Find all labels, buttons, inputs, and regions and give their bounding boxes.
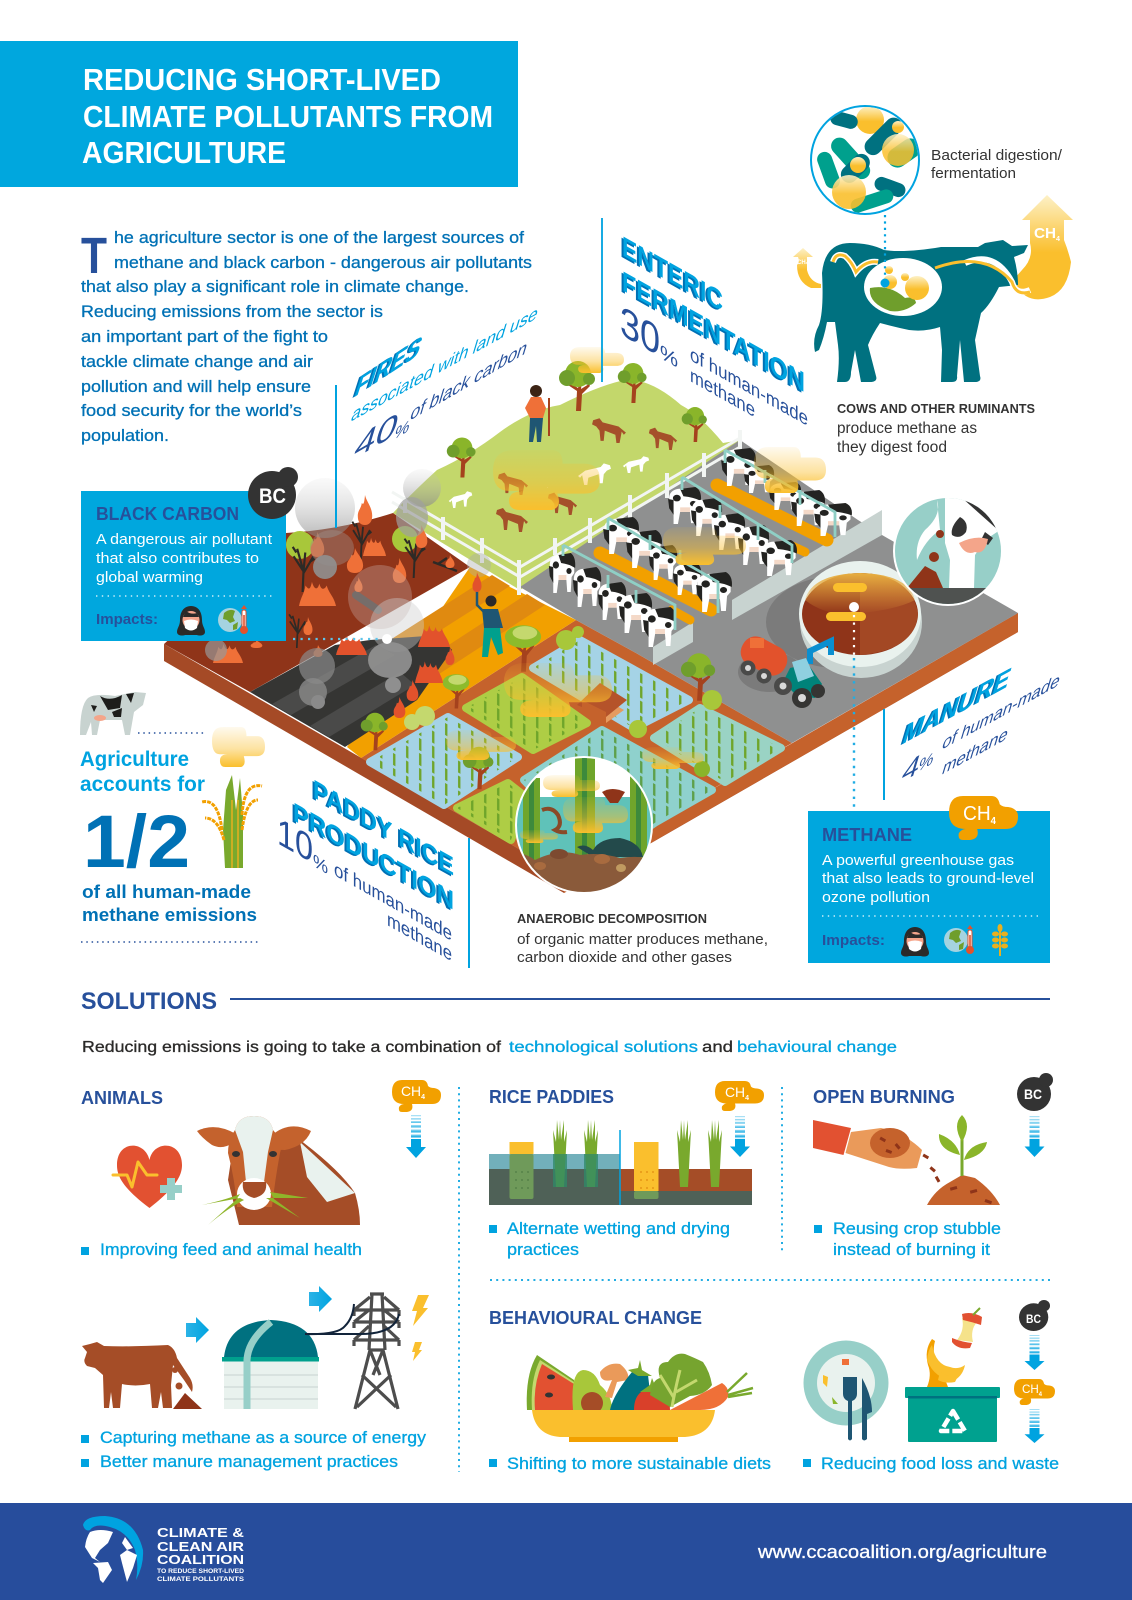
intro paragraph: tackle climate change and air	[81, 353, 314, 371]
pasture animals	[449, 418, 677, 532]
CH4 reduction badge: 4	[745, 1095, 749, 1102]
pasture hill	[393, 380, 741, 590]
BC reduction badge	[1017, 1073, 1053, 1157]
burnt trees	[286, 522, 457, 648]
label: bacterial digestion: Bacterial digestion/	[931, 147, 1063, 164]
fires stat: %	[392, 416, 413, 445]
diet bullet: Shifting to more sustainable diets	[507, 1454, 771, 1473]
icon: warming earth	[218, 605, 248, 634]
platform sides	[164, 613, 1018, 893]
black carbon description: global warming	[96, 569, 203, 586]
smoke plumes	[205, 469, 491, 709]
website: www.ccacoalition.org/agriculture	[757, 1541, 1047, 1562]
cow caption: COWS AND OTHER RUMINANTS	[837, 401, 1035, 416]
manure heading: MANURE	[899, 660, 1015, 751]
manure stat	[898, 669, 1063, 789]
intro paragraph: that also play a significant role in climate change.	[81, 278, 469, 296]
coalition name: CLEAN AIR	[157, 1540, 244, 1554]
methane panel: METHANE	[822, 825, 912, 845]
enteric heading: FERMENTATION	[622, 266, 805, 399]
manure label	[884, 660, 1063, 800]
feed bullet: Improving feed and animal health	[100, 1240, 362, 1259]
BC reduction badge: BC	[1024, 1087, 1042, 1102]
rice paddies	[370, 640, 781, 860]
panel: animals	[81, 1080, 441, 1471]
half of methane callout: accounts for	[80, 773, 205, 796]
paddy stat: methane	[387, 908, 452, 966]
icon: heart health	[113, 1146, 182, 1208]
coalition name: COALITION	[157, 1553, 244, 1567]
fires label	[336, 301, 541, 528]
connector methane	[849, 602, 859, 811]
panel: behavioural change: BEHAVIOURAL CHANGE	[489, 1308, 702, 1328]
intro paragraph: pollution and will help ensure	[81, 378, 311, 396]
black carbon panel	[81, 467, 298, 641]
burnt land	[164, 513, 470, 692]
black carbon panel: Impacts:	[96, 612, 158, 628]
panel: rice paddies: RICE PADDIES	[489, 1087, 614, 1107]
cow caption: they digest food	[837, 439, 947, 456]
cow caption	[837, 401, 1035, 456]
feed strips	[600, 485, 827, 620]
CH4 badge	[949, 796, 1018, 840]
paddy stat: 10	[277, 809, 313, 872]
CH4 reduction badge: CH	[725, 1084, 745, 1100]
anaerobic decomposition circle	[515, 756, 653, 900]
paddy stat: %	[313, 850, 328, 879]
bacteria circle	[811, 106, 924, 214]
BC badge: BC	[259, 485, 286, 508]
cow with digestive system: 4	[1056, 236, 1060, 243]
icon: lightning	[412, 1295, 429, 1361]
paddy heading: PRODUCTION	[291, 798, 452, 917]
icon: rice plant	[202, 775, 262, 868]
half of methane callout: of all human-made	[82, 881, 251, 902]
energy bullets: Capturing methane as a source of energy	[100, 1428, 427, 1447]
panel: rice paddies	[489, 1081, 764, 1259]
burning bullet: instead of burning it	[833, 1240, 990, 1259]
BC and CH4 reduction badges: 4	[1039, 1392, 1043, 1398]
farmyard walls	[653, 510, 882, 665]
anaerobic caption	[517, 912, 768, 966]
enteric fermentation label	[602, 218, 808, 431]
title banner: REDUCING SHORT-LIVED	[83, 63, 441, 97]
coalition name: CLIMATE &	[157, 1526, 244, 1540]
manure heading: MANURE	[897, 661, 1013, 752]
rice bullet: Alternate wetting and drying	[507, 1219, 730, 1238]
enteric heading: ENTERIC	[622, 231, 723, 318]
coalition name	[157, 1526, 245, 1583]
icon: bowl of food	[527, 1354, 753, 1442]
drop cap T: T	[81, 227, 107, 284]
udder circle	[893, 498, 1001, 606]
methane panel	[808, 796, 1050, 963]
paddy heading: PRODUCTION	[293, 797, 454, 916]
title banner: CLIMATE POLLUTANTS FROM	[83, 100, 493, 134]
manure stat: methane	[940, 723, 1011, 780]
anaerobic caption: carbon dioxide and other gases	[517, 950, 732, 966]
label: bacterial digestion	[931, 147, 1063, 182]
orange crop strip	[346, 567, 576, 758]
cow with digestive system	[793, 195, 1073, 382]
icon: small cow	[80, 692, 146, 735]
energy bullets: Better manure management practices	[100, 1452, 398, 1471]
arrow	[309, 1286, 332, 1312]
cow with digestive system: CH4	[797, 260, 808, 266]
solutions intro: and	[702, 1039, 733, 1056]
icon: health	[901, 927, 929, 957]
BC and CH4 reduction badges: CH	[1022, 1382, 1039, 1396]
black carbon description	[96, 531, 273, 586]
solutions intro	[82, 1039, 897, 1056]
isometric farm map	[164, 347, 1018, 900]
icon: health	[177, 606, 205, 636]
enteric stat: methane	[690, 364, 755, 422]
fires	[213, 495, 454, 718]
methane description: that also leads to ground-level	[822, 870, 1034, 887]
icon: wheat	[992, 924, 1008, 956]
rice water diagram	[489, 1120, 752, 1205]
title banner: AGRICULTURE	[82, 136, 286, 170]
enteric stat	[620, 296, 808, 431]
manure stat: %	[916, 748, 937, 777]
intro paragraph	[81, 227, 532, 445]
arrow	[186, 1317, 209, 1343]
BC and CH4 reduction badges	[1014, 1300, 1055, 1443]
fires stat: 40	[350, 404, 404, 468]
icon: biogas digester	[222, 1320, 319, 1409]
fence	[392, 430, 740, 595]
fires stat	[350, 336, 530, 468]
icon: apple core	[952, 1308, 982, 1348]
icon: cow with manure	[82, 1342, 202, 1409]
footer	[0, 1503, 1132, 1600]
connector black carbon	[293, 634, 392, 644]
rice bullet: practices	[507, 1240, 579, 1259]
icon: plate and cutlery	[804, 1340, 888, 1440]
intro paragraph: he agriculture sector is one of the largest sources of	[114, 229, 524, 247]
solutions heading: SOLUTIONS	[81, 988, 217, 1015]
BC and CH4 reduction badges: BC	[1026, 1312, 1041, 1326]
paddy stat: of human-made	[334, 858, 452, 946]
panel: animals: ANIMALS	[81, 1088, 163, 1108]
burning bullet: Reusing crop stubble	[833, 1219, 1001, 1238]
methane description: ozone pollution	[822, 889, 930, 906]
fires heading: FIRES	[349, 329, 425, 406]
CH4 reduction badge	[392, 1080, 441, 1158]
title banner	[0, 41, 518, 187]
icon: warming earth	[944, 925, 974, 954]
half of methane callout	[80, 692, 265, 942]
fires subtitle: associated with land use	[349, 301, 541, 427]
methane description	[822, 852, 1034, 906]
logo	[83, 1516, 143, 1583]
enteric heading: ENTERIC	[620, 232, 721, 319]
paddy heading: PADDY RICE	[311, 775, 452, 883]
enteric stat: %	[660, 340, 678, 373]
intro paragraph: methane and black carbon - dangerous air pollutants	[114, 254, 532, 272]
energy bullets	[81, 1428, 427, 1471]
burnt black strip	[250, 635, 452, 747]
enteric heading: FERMENTATION	[620, 267, 803, 400]
cow with digestive system: CH	[1034, 225, 1056, 242]
waste bullet: Reducing food loss and waste	[821, 1454, 1059, 1473]
anaerobic caption: of organic matter produces methane,	[517, 932, 768, 948]
half of methane callout: Agriculture	[80, 748, 189, 771]
solutions intro: Reducing emissions is going to take a combination of	[82, 1039, 502, 1056]
panel: behavioural change	[489, 1300, 1059, 1473]
intro paragraph: an important part of the fight to	[81, 328, 328, 346]
half of methane callout: methane emissions	[82, 904, 257, 925]
anaerobic caption: ANAEROBIC DECOMPOSITION	[517, 912, 707, 926]
black carbon description: A dangerous air pollutant	[96, 531, 273, 548]
coalition name: TO REDUCE SHORT-LIVED	[157, 1569, 245, 1575]
fires heading: FIRES	[351, 328, 427, 405]
black carbon panel: BLACK CARBON	[96, 504, 239, 524]
half of methane callout: 1/2	[83, 800, 190, 883]
CH4 badge: CH	[963, 803, 992, 825]
fires heading	[349, 328, 427, 406]
CH4 reduction badge: CH	[401, 1083, 421, 1099]
panel: open burning	[813, 1073, 1053, 1259]
manure pit	[766, 561, 922, 678]
icon: cow eating	[197, 1116, 360, 1225]
solutions intro: behavioural change	[737, 1039, 897, 1056]
trees	[361, 361, 722, 789]
pen rails	[563, 450, 835, 630]
intro paragraph: Reducing emissions from the sector is	[81, 303, 383, 321]
manure stat: 4	[898, 746, 925, 789]
black carbon description: that also contributes to	[96, 550, 259, 567]
dividers	[459, 1087, 1051, 1472]
enteric heading	[620, 231, 805, 400]
paddy house	[577, 683, 627, 727]
intro paragraph: population.	[81, 427, 169, 445]
dotted link bacteria to stomach	[884, 215, 886, 282]
icon: gas cloud	[212, 727, 265, 767]
intro paragraph: food security for the world’s	[81, 402, 302, 420]
icon: recycling bin	[905, 1339, 1000, 1442]
fires stat: of black carbon	[408, 336, 530, 426]
burning bullet	[814, 1219, 1001, 1259]
manure stat: of human-made	[940, 669, 1063, 755]
tractor and tanker	[736, 631, 825, 708]
paddy rice label	[277, 774, 469, 968]
CH4 reduction badge	[715, 1081, 764, 1157]
icon: hand spreading stubble	[813, 1115, 1000, 1205]
CH4 reduction badge: 4	[421, 1094, 425, 1101]
solutions intro: technological solutions	[509, 1039, 698, 1056]
coalition name: CLIMATE POLLUTANTS	[157, 1577, 244, 1583]
farmer with torch	[472, 572, 503, 657]
field paths	[361, 620, 792, 875]
icon: power pylon	[305, 1294, 399, 1409]
label: bacterial digestion: fermentation	[931, 165, 1016, 182]
methane panel: Impacts:	[822, 933, 885, 949]
panel: open burning: OPEN BURNING	[813, 1087, 955, 1107]
enteric stat: of human-made	[690, 343, 808, 431]
paddy heading: PADDY RICE	[313, 774, 454, 882]
rice bullet	[489, 1219, 730, 1259]
enteric stat: 30	[620, 296, 660, 366]
gas clouds	[446, 347, 826, 769]
farmer on pasture	[525, 385, 549, 442]
cow caption: produce methane as	[837, 420, 977, 437]
methane description: A powerful greenhouse gas	[822, 852, 1014, 869]
CH4 badge: 4	[991, 816, 996, 827]
farmyard ground	[520, 440, 1018, 743]
dairy cows	[549, 448, 852, 647]
BC badge	[248, 467, 298, 519]
paddy stat	[277, 809, 452, 966]
